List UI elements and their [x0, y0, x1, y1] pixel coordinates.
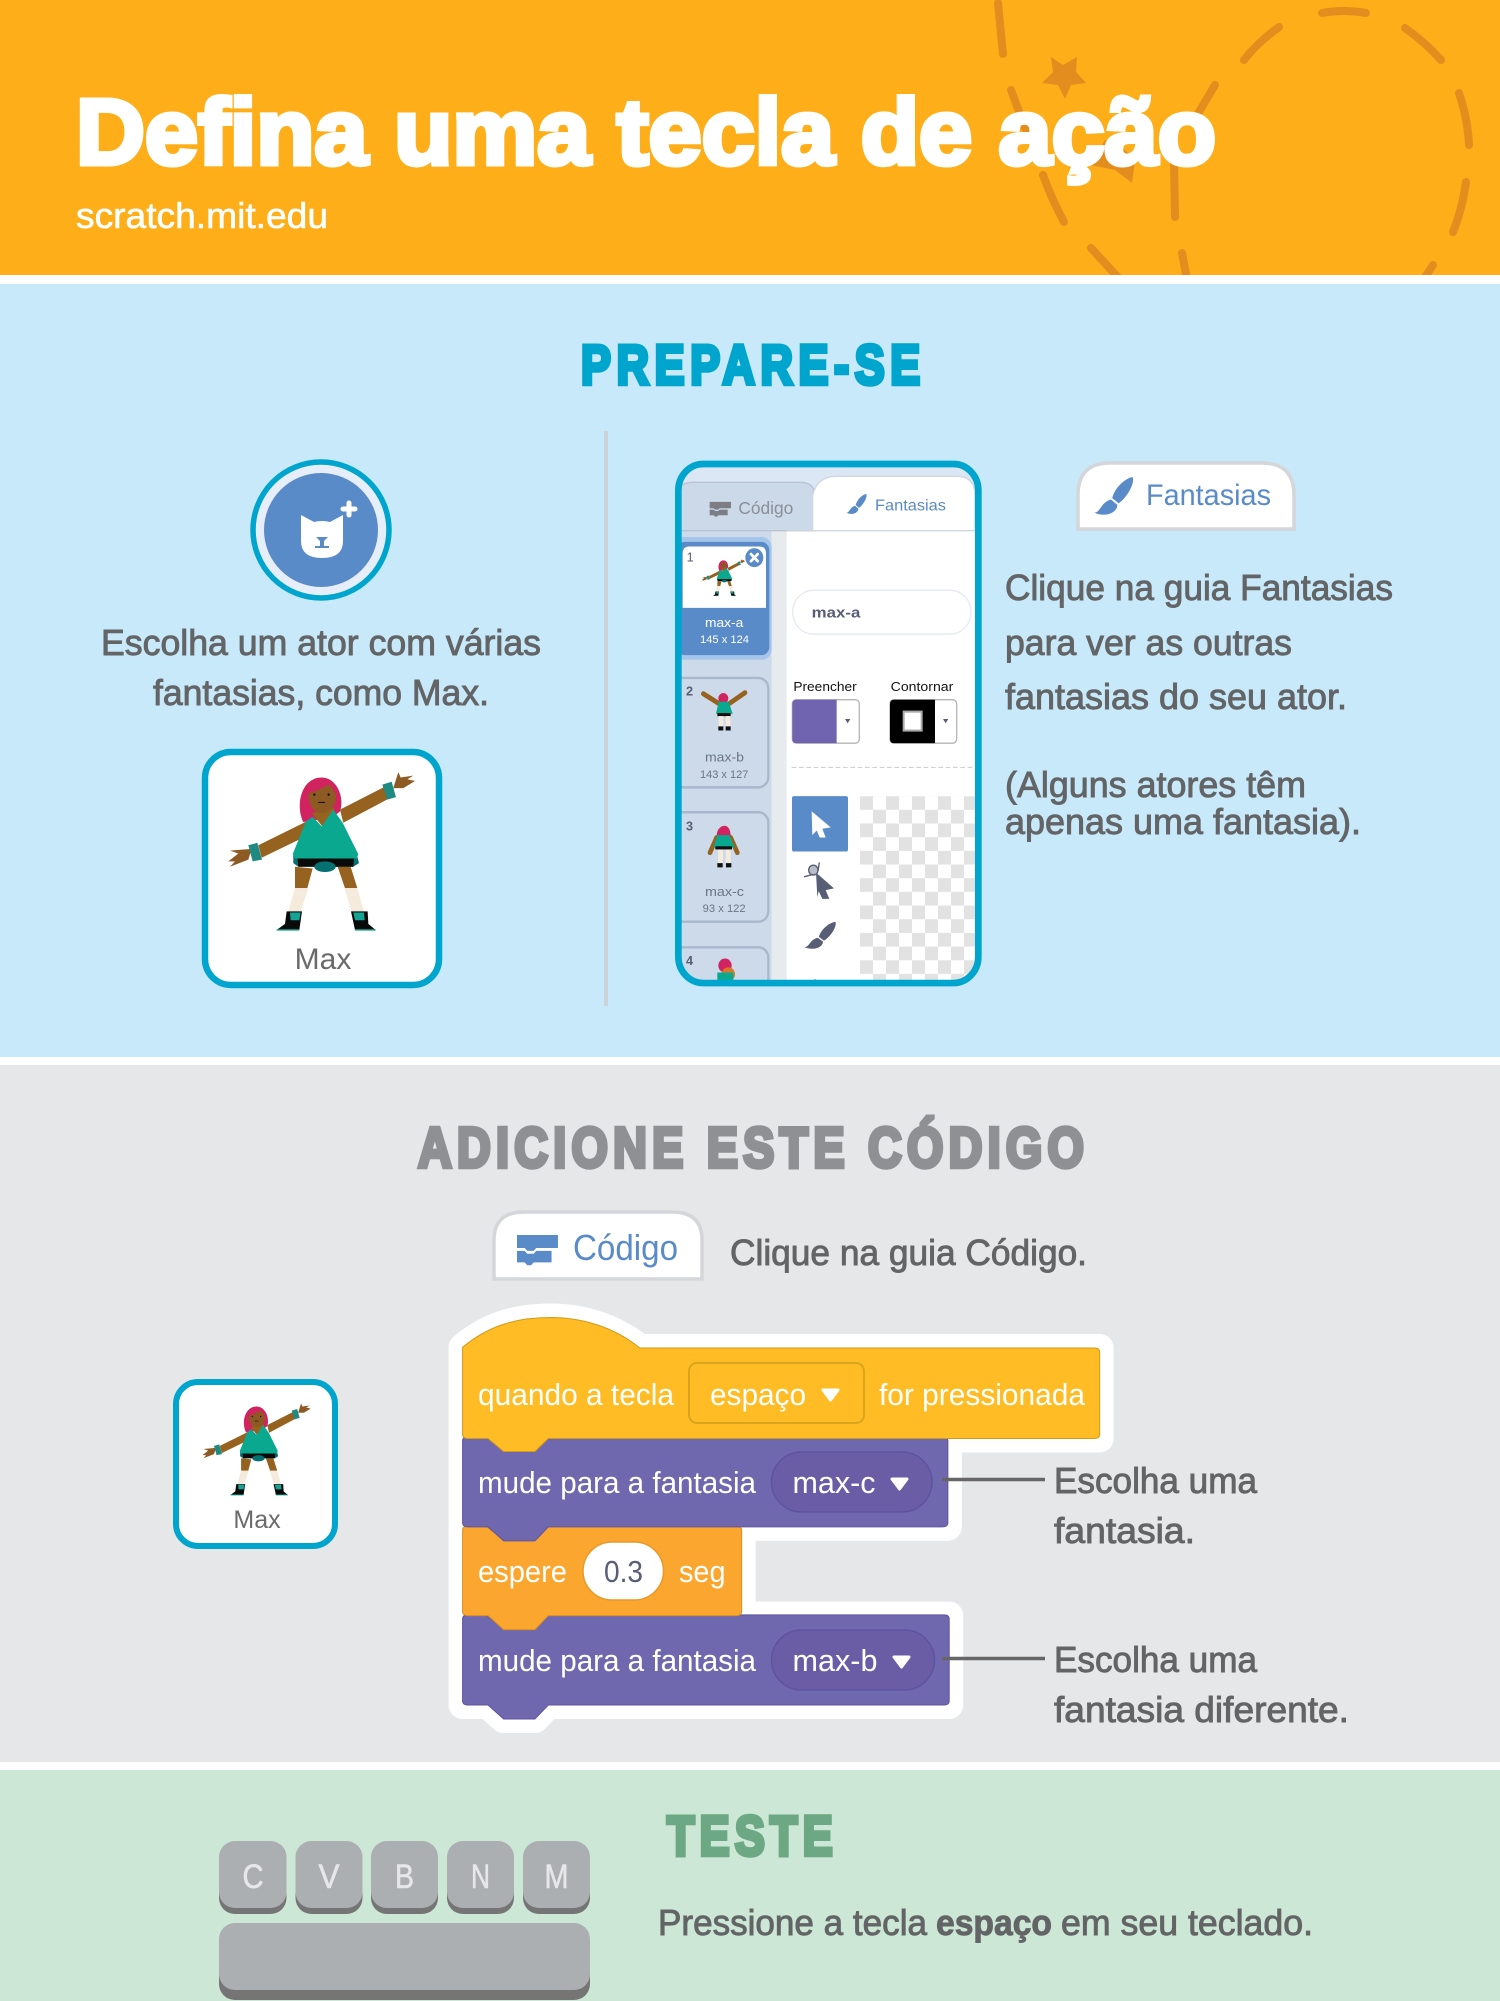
screenshot: costumes editor: max-c [705, 885, 744, 899]
screenshot: costumes editor: 3 [686, 818, 693, 834]
screenshot: costumes editor: Preencher [793, 679, 857, 694]
code blocks [463, 1317, 1100, 1719]
dropdown: espaço: espaço [710, 1377, 806, 1412]
screenshot: costumes editor: Fantasias [875, 497, 946, 514]
panel: header [0, 0, 1500, 285]
screenshot: costumes editor: 2 [686, 683, 693, 699]
text: choose a sprite: fantasias, como Max. [153, 672, 489, 713]
screenshot: costumes editor: 4 [686, 953, 694, 968]
code blocks: quando a tecla [478, 1377, 675, 1412]
code blocks: mude para a fantasia [478, 1465, 757, 1500]
text: press the space key: Pressione a tecla [658, 1902, 928, 1943]
screenshot: costumes editor: max-a [705, 616, 744, 630]
callout: choose a costume: fantasia. [1054, 1510, 1195, 1551]
text: click costumes tab: fantasias do seu ator. [1005, 676, 1347, 717]
text: choose a sprite [101, 622, 541, 713]
heading: adicione este código: ADICIONE ESTE CÓDIGO [418, 1117, 1084, 1180]
panel: teste [0, 1770, 1500, 2001]
dropdown: max-b: max-b [792, 1643, 878, 1678]
code blocks: espere [478, 1554, 567, 1589]
text: click code tab: Clique na guia Código. [730, 1232, 1087, 1273]
icon: keyboard: N [471, 1858, 490, 1896]
tab: Fantasias: Fantasias [1146, 479, 1271, 512]
text: note about single costume: (Alguns atores têm [1005, 764, 1306, 805]
text: press the space key [658, 1902, 1313, 1943]
screenshot: costumes editor: max-a [812, 605, 862, 622]
screenshot: costumes editor: max-b [705, 750, 744, 764]
icon: choose sprite button [253, 462, 389, 598]
screenshot: costumes editor: Código [738, 499, 793, 518]
text: click costumes tab: para ver as outras [1005, 622, 1292, 663]
heading: teste: TESTE [667, 1804, 833, 1867]
sprite card: Max small [176, 1382, 335, 1546]
screenshot: costumes editor: 145 x 124 [700, 634, 749, 646]
callout: choose a different costume: Escolha uma [1054, 1639, 1258, 1680]
icon: keyboard: M [544, 1858, 568, 1896]
text: click costumes tab: Clique na guia Fantasias [1005, 567, 1393, 608]
title: Defina uma tecla de ação [76, 80, 1216, 184]
code blocks: seg [679, 1554, 726, 1589]
callout: choose a different costume [942, 1639, 1349, 1730]
decoration: dashed stars [998, 3, 1469, 285]
code blocks: for pressionada [879, 1377, 1086, 1412]
dropdown: max-b [772, 1630, 934, 1690]
dropdown: max-c [772, 1452, 932, 1512]
callout: choose a costume [942, 1460, 1258, 1551]
screenshot: costumes editor: 1 [687, 549, 694, 565]
sprite card: Max [205, 752, 439, 985]
tab: Fantasias [1078, 463, 1294, 529]
icon: keyboard: B [395, 1858, 414, 1896]
panel: prepare-se [0, 284, 1500, 1057]
screenshot: costumes editor [673, 461, 982, 1017]
text: press the space key: espaço [936, 1902, 1052, 1943]
icon: keyboard: C [242, 1858, 264, 1896]
tab: Código [494, 1212, 702, 1279]
icon: keyboard: V [318, 1858, 340, 1896]
sprite card: Max small: Max [233, 1506, 281, 1534]
text: click costumes tab [1005, 567, 1393, 717]
screenshot: costumes editor: 93 x 122 [703, 903, 746, 915]
panel: adicione este código [0, 1065, 1500, 1762]
screenshot: costumes editor: Contornar [891, 679, 954, 694]
subtitle: url: scratch.mit.edu [76, 195, 328, 236]
code blocks: mude para a fantasia [478, 1643, 757, 1678]
dropdown: espaço [689, 1363, 864, 1423]
icon: keyboard [219, 1841, 590, 2000]
text: note about single costume: apenas uma fantasia). [1005, 801, 1361, 842]
dropdown: max-c: max-c [792, 1465, 876, 1500]
screenshot: costumes editor: 143 x 127 [700, 769, 748, 781]
sprite card: Max: Max [295, 943, 351, 976]
heading: prepare-se: PREPARE-SE [581, 333, 920, 396]
text: press the space key: em seu teclado. [1061, 1902, 1313, 1943]
input: 0.3 [583, 1542, 664, 1600]
input: 0.3: 0.3 [604, 1554, 643, 1589]
callout: choose a costume: Escolha uma [1054, 1460, 1258, 1501]
text: choose a sprite: Escolha um ator com várias [101, 622, 541, 663]
callout: choose a different costume: fantasia diferente. [1054, 1689, 1349, 1730]
text: note about single costume [1005, 764, 1361, 842]
tab: Código: Código [573, 1227, 678, 1268]
